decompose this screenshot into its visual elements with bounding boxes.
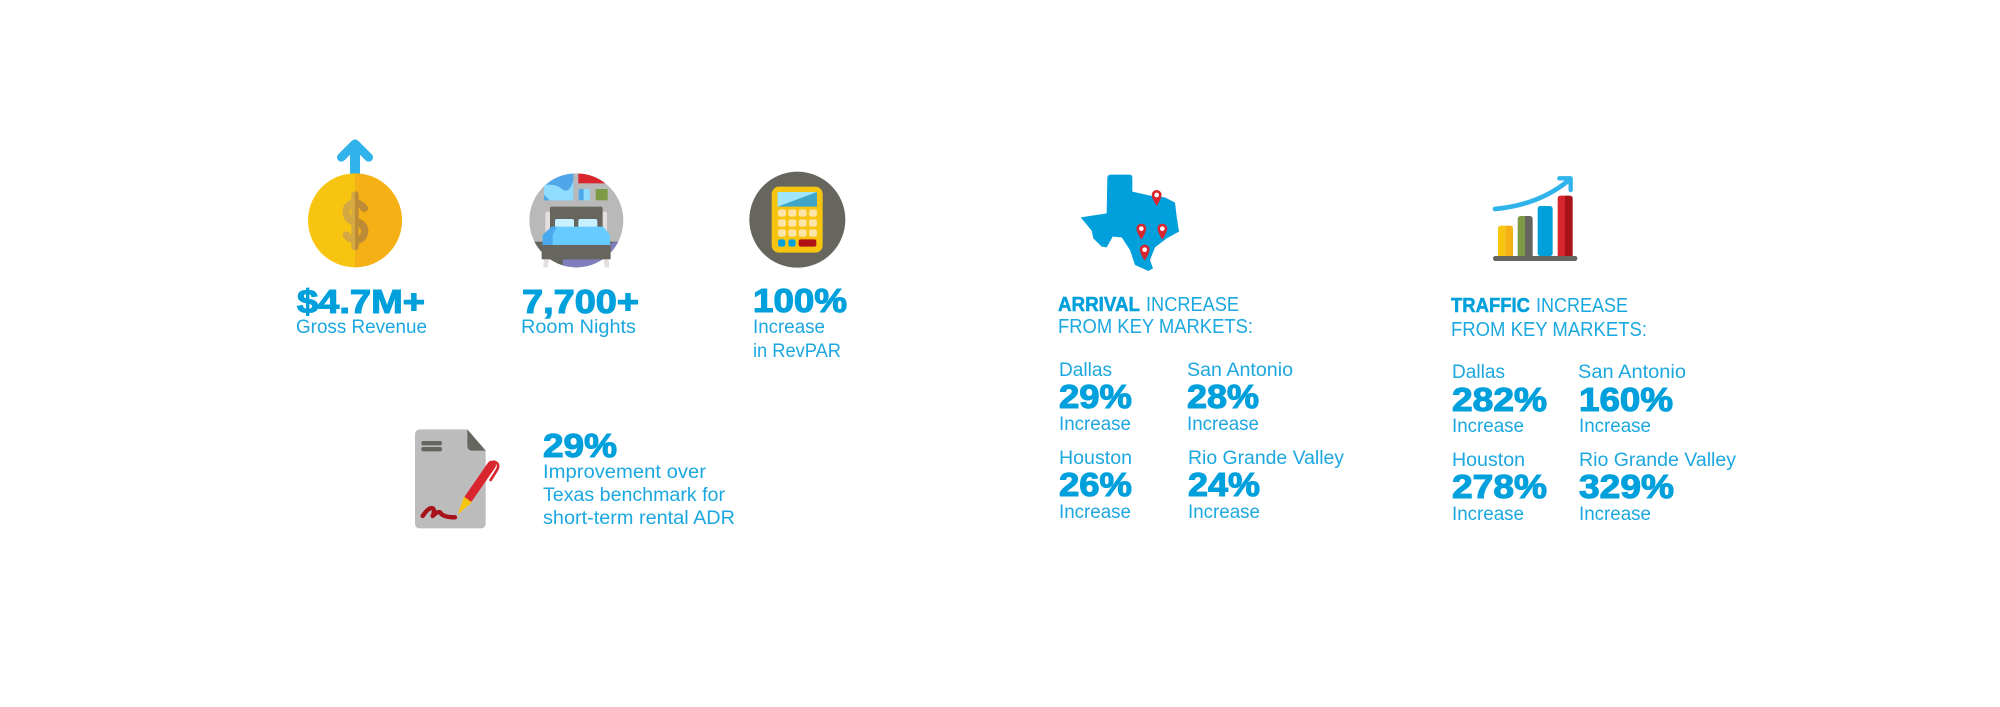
label: revpar: Increase [753, 317, 825, 338]
panel: arrival increase [1058, 175, 1345, 523]
metric: Rio Grande Valley traffic: Increase [1579, 504, 1651, 525]
metric: Houston traffic [1452, 450, 1547, 525]
icon: bed [529, 173, 624, 268]
heading: arrival increase: FROM KEY MARKETS: [1058, 316, 1253, 338]
metric: San Antonio arrivals [1187, 360, 1293, 435]
metric: Houston arrivals: 26% [1059, 466, 1132, 503]
stat: ADR benchmark [415, 427, 735, 529]
metric: Dallas arrivals: Increase [1059, 414, 1131, 435]
icon: rising bar chart [1493, 178, 1577, 261]
heading: traffic increase: INCREASE [1536, 295, 1628, 317]
metric: San Antonio traffic: San Antonio [1578, 362, 1686, 383]
label: gross revenue: Gross Revenue [296, 317, 427, 338]
metric: Houston traffic: 278% [1452, 468, 1547, 505]
icon: calculator [749, 172, 845, 268]
icon: signed document [415, 429, 498, 528]
label: ADR improvement: Improvement over [543, 462, 707, 483]
value: room nights: 7,700+ [522, 283, 639, 320]
value: revpar: 100% [753, 282, 847, 319]
icon: Texas map with pins [1081, 175, 1179, 271]
heading: arrival increase: ARRIVAL [1058, 294, 1140, 316]
metric: Houston traffic: Increase [1452, 504, 1524, 525]
metric: Dallas arrivals: 29% [1059, 378, 1132, 415]
metric: San Antonio traffic [1578, 362, 1686, 437]
heading: traffic increase: FROM KEY MARKETS: [1451, 319, 1647, 341]
metric: Dallas traffic: Dallas [1452, 362, 1505, 383]
heading: arrival increase: INCREASE [1146, 294, 1239, 316]
metric: Dallas traffic: Increase [1452, 416, 1524, 437]
metric: Rio Grande Valley arrivals [1188, 448, 1345, 523]
stat: revpar [749, 172, 847, 362]
metric: Rio Grande Valley arrivals: Rio Grande Valley [1188, 448, 1345, 469]
metric: Houston traffic: Houston [1452, 450, 1525, 471]
metric: San Antonio traffic: 160% [1579, 381, 1673, 418]
icon: coin with up arrow [308, 144, 402, 267]
metric: Rio Grande Valley traffic [1579, 450, 1737, 525]
label: revpar: in RevPAR [753, 341, 841, 362]
metric: Dallas traffic: 282% [1452, 381, 1547, 418]
label: room nights: Room Nights [521, 317, 636, 338]
metric: Rio Grande Valley traffic: Rio Grande Valley [1579, 450, 1737, 471]
stat: gross revenue [296, 144, 427, 338]
metric: San Antonio arrivals: 28% [1187, 378, 1259, 415]
value: gross revenue: $4.7M+ [297, 283, 425, 320]
value: ADR improvement: 29% [543, 427, 617, 464]
panel: traffic increase [1451, 178, 1737, 525]
metric: Dallas arrivals: Dallas [1059, 360, 1112, 381]
metric: Rio Grande Valley arrivals: 24% [1188, 466, 1260, 503]
metric: San Antonio arrivals: Increase [1187, 414, 1259, 435]
label: ADR improvement: Texas benchmark for [543, 485, 726, 506]
metric: Rio Grande Valley traffic: 329% [1579, 468, 1674, 505]
metric: Houston arrivals: Houston [1059, 448, 1132, 469]
metric: Rio Grande Valley arrivals: Increase [1188, 502, 1260, 523]
metric: San Antonio arrivals: San Antonio [1187, 360, 1293, 381]
label: ADR improvement: short-term rental ADR [543, 508, 735, 529]
stat: room nights [521, 172, 639, 338]
metric: Houston arrivals [1059, 448, 1132, 523]
heading: traffic increase: TRAFFIC [1451, 295, 1530, 317]
metric: San Antonio traffic: Increase [1579, 416, 1651, 437]
metric: Dallas traffic [1452, 362, 1547, 437]
metric: Dallas arrivals [1059, 360, 1132, 435]
metric: Houston arrivals: Increase [1059, 502, 1131, 523]
